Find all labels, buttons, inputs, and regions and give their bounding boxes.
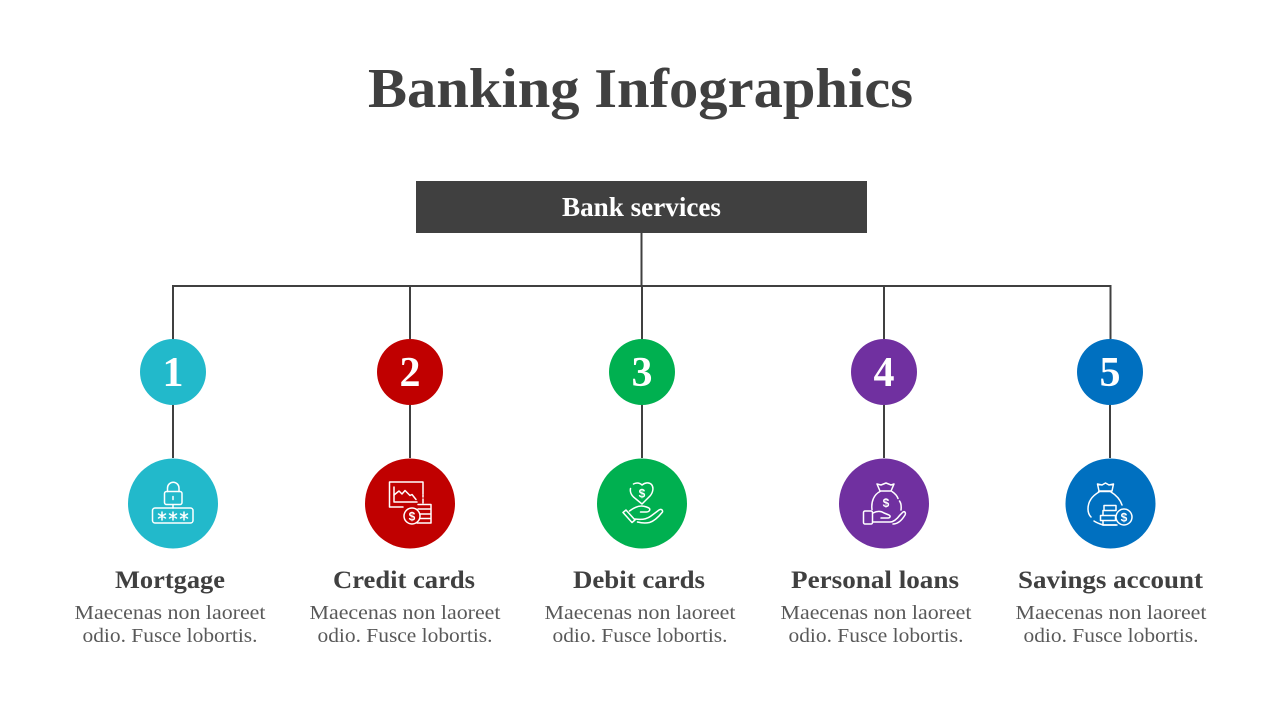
description: mortgage <box>74 602 266 647</box>
heading: credit cards: Credit cards <box>333 567 475 594</box>
icon: padlock and password <box>128 458 218 548</box>
icon: money bag and coins: $ <box>1121 510 1128 524</box>
column 2: credit cards <box>310 339 501 647</box>
number badge 3: 3 <box>632 350 652 396</box>
description: personal loans: odio. Fusce lobortis. <box>788 625 964 647</box>
description: mortgage: Maecenas non laoreet <box>74 602 266 624</box>
number badge 5: 5 <box>1100 350 1120 396</box>
number badge 2: 2 <box>400 350 420 396</box>
number badge 4: 4 <box>874 350 894 396</box>
description: personal loans <box>780 602 972 647</box>
description: savings account: Maecenas non laoreet <box>1016 602 1207 624</box>
icon: heart over hand <box>597 458 687 548</box>
heading: personal loans: Personal loans <box>791 567 959 594</box>
description: debit cards <box>544 602 736 647</box>
heading: mortgage: Mortgage <box>115 567 225 594</box>
description: debit cards: Maecenas non laoreet <box>544 602 736 624</box>
root box: bank services <box>416 181 867 233</box>
number badge 1 <box>140 339 206 405</box>
description: credit cards: odio. Fusce lobortis. <box>318 625 492 647</box>
column 3: debit cards <box>544 339 736 647</box>
description: debit cards: odio. Fusce lobortis. <box>552 625 728 647</box>
root box: bank services: Bank services <box>562 192 721 222</box>
number badge 3 <box>609 339 675 405</box>
description: savings account: odio. Fusce lobortis. <box>1024 625 1198 647</box>
column 5: savings account <box>1016 339 1207 647</box>
icon: money bag over hand <box>839 458 929 548</box>
icon: money bag and coins <box>1066 458 1156 548</box>
number badge 4 <box>851 339 917 405</box>
description: mortgage: odio. Fusce lobortis. <box>82 625 258 647</box>
connector tree <box>173 233 1110 458</box>
icon: heart over hand: $ <box>639 486 646 500</box>
description: credit cards <box>310 602 501 647</box>
heading: debit cards: Debit cards <box>573 567 705 594</box>
column 1: mortgage <box>74 339 266 647</box>
number badge 5 <box>1077 339 1143 405</box>
number badge 2 <box>377 339 443 405</box>
title: Banking Infographics <box>368 58 913 120</box>
heading: savings account: Savings account <box>1018 567 1204 594</box>
icon: chart and coins: $ <box>409 510 416 524</box>
icon: chart and coins <box>365 458 455 548</box>
column 4: personal loans <box>780 339 972 647</box>
number badge 1: 1 <box>162 350 184 396</box>
description: credit cards: Maecenas non laoreet <box>310 602 501 624</box>
icon: money bag over hand: $ <box>883 496 890 510</box>
description: savings account <box>1016 602 1207 647</box>
description: personal loans: Maecenas non laoreet <box>780 602 972 624</box>
